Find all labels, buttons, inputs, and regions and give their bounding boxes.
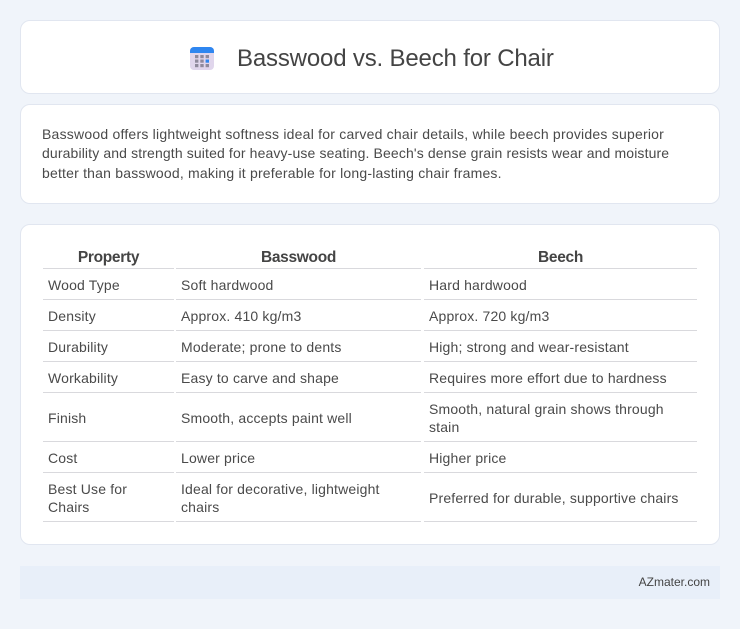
- summary text: better than basswood, making it preferable for long-lasting chair frames.: [42, 165, 502, 181]
- row: cost: [48, 450, 507, 466]
- row: finish: [48, 401, 664, 435]
- row: finish: Smooth, accepts paint well: [181, 410, 352, 426]
- table header: [78, 249, 583, 266]
- title: Basswood vs. Beech for Chair: [237, 45, 554, 72]
- row: density: Approx. 720 kg/m3: [429, 308, 549, 324]
- summary text: [42, 126, 669, 181]
- table header: Beech: [538, 249, 583, 266]
- row: best use for chairs: chairs: [181, 499, 219, 515]
- row: finish: Smooth, natural grain shows through: [429, 401, 664, 417]
- row: wood type: Soft hardwood: [181, 277, 274, 293]
- comparison table panel: [20, 224, 720, 545]
- summary text: Basswood offers lightweight softness ideal for carved chair details, while beech provides superior: [42, 126, 664, 142]
- row: best use for chairs: Preferred for durable, supportive chairs: [429, 490, 679, 506]
- table header: Basswood: [261, 249, 336, 266]
- row: workability: Requires more effort due to hardness: [429, 370, 667, 386]
- summary panel: [20, 104, 720, 204]
- row: durability: High; strong and wear-resistant: [429, 339, 629, 355]
- row: best use for chairs: Ideal for decorative, lightweight: [181, 481, 380, 497]
- icon: calendar: [190, 47, 214, 70]
- row: density: Approx. 410 kg/m3: [181, 308, 301, 324]
- row: workability: Easy to carve and shape: [181, 370, 339, 386]
- footer text: AZmater.com: [639, 575, 710, 589]
- row: finish: Finish: [48, 410, 86, 426]
- row: workability: Workability: [48, 370, 118, 386]
- row: workability: [48, 370, 667, 386]
- row: density: [48, 308, 549, 324]
- row: cost: Cost: [48, 450, 77, 466]
- row: best use for chairs: Chairs: [48, 499, 89, 515]
- row: best use for chairs: [48, 481, 679, 515]
- comparison table: [43, 249, 697, 522]
- footer bar: [20, 566, 720, 599]
- row: cost: Lower price: [181, 450, 255, 466]
- row: durability: Moderate; prone to dents: [181, 339, 342, 355]
- header panel: [20, 20, 720, 94]
- row: best use for chairs: Best Use for: [48, 481, 127, 497]
- row: cost: Higher price: [429, 450, 507, 466]
- summary text: durability and strength suited for heavy-use seating. Beech's dense grain resists wear and moisture: [42, 145, 669, 161]
- row: density: Density: [48, 308, 96, 324]
- row: wood type: Hard hardwood: [429, 277, 527, 293]
- row: finish: stain: [429, 419, 459, 435]
- table header: Property: [78, 249, 139, 266]
- row: wood type: Wood Type: [48, 277, 120, 293]
- row: durability: [48, 339, 629, 355]
- row: wood type: [48, 277, 527, 293]
- row: durability: Durability: [48, 339, 108, 355]
